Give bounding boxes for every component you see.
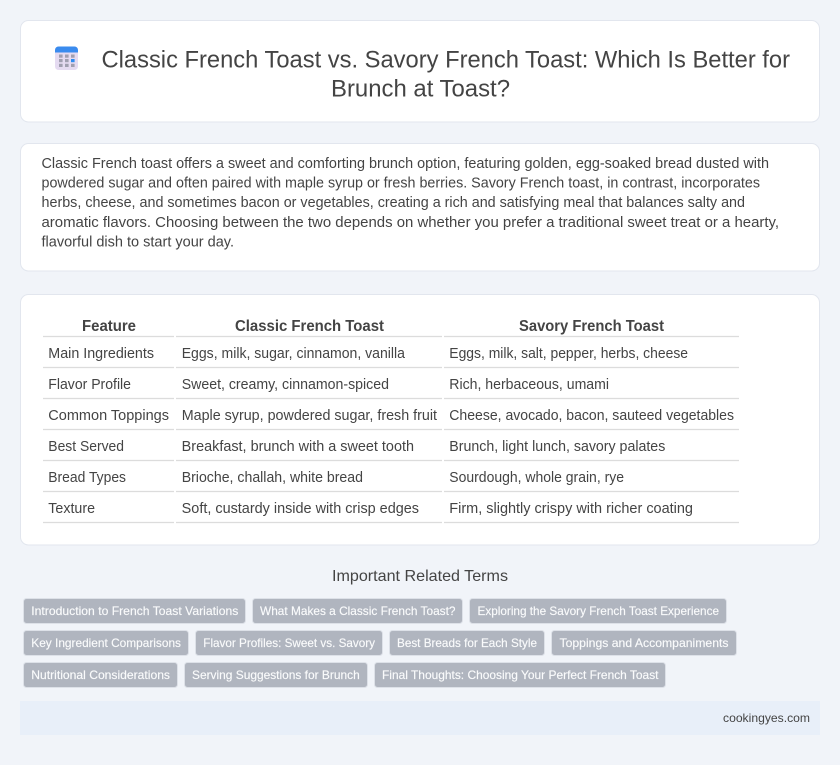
tag xyxy=(24,662,178,688)
tag xyxy=(252,598,462,624)
table row: bread types: Brioche, challah, white bread xyxy=(182,470,363,486)
tag xyxy=(24,598,246,624)
panel: related term tags xyxy=(24,598,736,688)
text block: description xyxy=(42,156,779,250)
tag: Final Thoughts: Choosing Your Perfect French Toast xyxy=(382,668,659,682)
table row: common toppings xyxy=(43,408,739,430)
table row: flavor profile xyxy=(43,377,739,398)
tag: Serving Suggestions for Brunch xyxy=(192,668,360,682)
tag xyxy=(24,630,188,656)
tag: Nutritional Considerations xyxy=(31,668,170,682)
text block: description: Classic French toast offers a sweet and comforting brunch option, featuring golden, egg-soaked bread dusted with xyxy=(42,156,769,172)
icon: calendar xyxy=(55,46,78,70)
table row: best served xyxy=(43,439,739,460)
table row: best served: Best Served xyxy=(48,439,124,455)
table row: texture xyxy=(43,501,739,522)
tag: Exploring the Savory French Toast Experience xyxy=(478,604,719,618)
tag xyxy=(184,662,368,688)
table row: common toppings: Cheese, avocado, bacon, sauteed vegetables xyxy=(449,408,734,424)
tag xyxy=(374,662,666,688)
table row: flavor profile: Rich, herbaceous, umami xyxy=(449,377,609,393)
tag: Best Breads for Each Style xyxy=(397,636,537,650)
panel: comparison table xyxy=(20,294,820,545)
text block: description: herbs, cheese, and sometimes bacon or vegetables, creating a rich and satisfying meal that balances salty and xyxy=(42,195,745,211)
footer source text: cookingyes.com xyxy=(723,711,810,725)
tag: Toppings and Accompaniments xyxy=(560,636,728,650)
table row: flavor profile: Sweet, creamy, cinnamon-spiced xyxy=(182,377,389,393)
text block: description: powdered sugar and often paired with maple syrup or fresh berries. Savory French toast, in contrast, incorporates xyxy=(42,176,760,192)
table row: main ingredients: Main Ingredients xyxy=(48,346,154,362)
table header xyxy=(43,318,739,336)
tag xyxy=(196,630,382,656)
tag xyxy=(390,630,544,656)
tag xyxy=(552,630,736,656)
title: Brunch at Toast? xyxy=(331,76,510,102)
table header: Savory French Toast xyxy=(519,318,665,335)
table row: bread types: Sourdough, whole grain, rye xyxy=(449,470,624,486)
tag xyxy=(470,598,726,624)
text block: description: flavorful dish to start your day. xyxy=(42,234,234,250)
panel: title card xyxy=(20,20,820,122)
table row: bread types: Bread Types xyxy=(48,470,126,486)
panel: intro paragraph xyxy=(20,144,820,271)
title xyxy=(102,46,790,102)
table row: common toppings: Maple syrup, powdered sugar, fresh fruit xyxy=(182,408,437,424)
table row: main ingredients xyxy=(43,346,739,368)
tag: Flavor Profiles: Sweet vs. Savory xyxy=(203,636,375,650)
table row: main ingredients: Eggs, milk, sugar, cinnamon, vanilla xyxy=(182,346,405,362)
tag: What Makes a Classic French Toast? xyxy=(260,604,456,618)
footer bar xyxy=(20,701,820,735)
table row: common toppings: Common Toppings xyxy=(48,408,169,424)
title: Classic French Toast vs. Savory French Toast: Which Is Better for xyxy=(102,46,790,74)
table header: Feature xyxy=(82,318,136,335)
text block: description: aromatic flavors. Choosing between the two depends on whether you prefer a traditional sweet treat or a hearty, xyxy=(42,215,779,231)
table row: texture: Soft, custardy inside with crisp edges xyxy=(182,501,419,517)
table row: texture: Texture xyxy=(48,501,95,517)
table row: main ingredients: Eggs, milk, salt, pepper, herbs, cheese xyxy=(449,346,688,362)
table row: best served: Breakfast, brunch with a sweet tooth xyxy=(182,439,414,455)
table row: flavor profile: Flavor Profile xyxy=(48,377,131,393)
table row: bread types xyxy=(43,470,739,492)
tag: Introduction to French Toast Variations xyxy=(31,604,238,618)
table row: best served: Brunch, light lunch, savory palates xyxy=(449,439,665,455)
heading: important related terms: Important Related Terms xyxy=(332,568,508,585)
tag: Key Ingredient Comparisons xyxy=(31,636,181,650)
table row: texture: Firm, slightly crispy with richer coating xyxy=(449,501,693,517)
table header: Classic French Toast xyxy=(235,318,385,335)
